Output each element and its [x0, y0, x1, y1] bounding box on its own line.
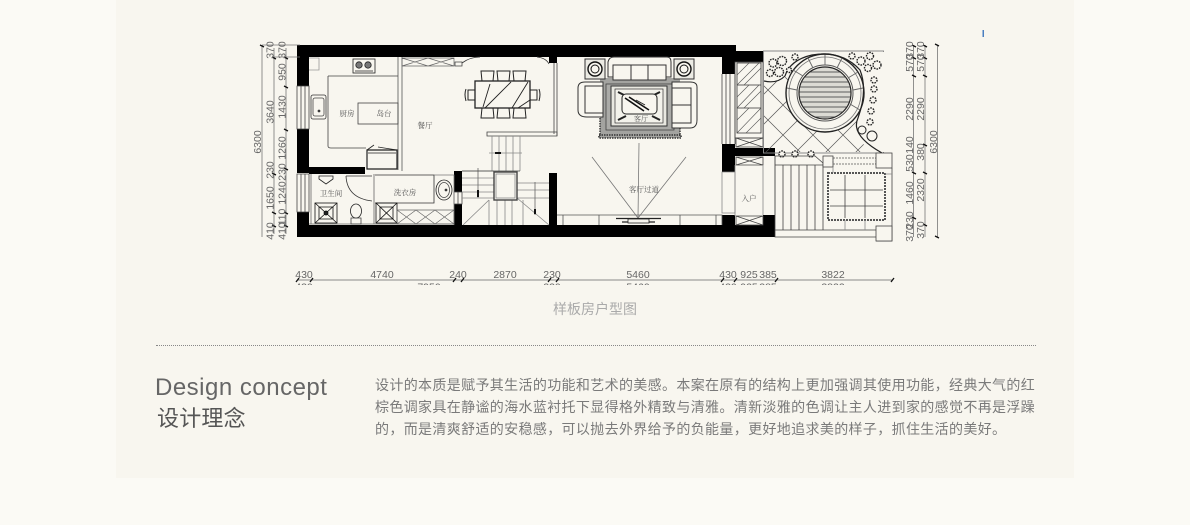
right dimensions: 370: [904, 224, 916, 242]
bottom dimensions: 5460: [626, 269, 650, 281]
room labels: 餐厅: [418, 120, 433, 130]
left dimensions: 3640: [264, 100, 276, 124]
toilet: [350, 204, 362, 224]
left dimensions: 370: [276, 41, 288, 59]
right dimensions: 140: [904, 136, 916, 154]
right dimensions: 1460: [904, 181, 916, 205]
dining table and chairs: [402, 58, 540, 118]
right dimensions: 370: [915, 221, 927, 239]
bottom dimensions: 430: [719, 269, 737, 281]
plants: [766, 52, 881, 157]
shower box: [315, 203, 337, 223]
living room: sofas: [578, 57, 697, 128]
bottom dimensions: 230: [543, 282, 561, 294]
stairs: [462, 136, 549, 225]
text block: design concept: 的，而是清爽舒适的安稳感，可以抛去外界给予的负能量，更好地追求美的样子，抓住生活的美好。: [375, 421, 1006, 437]
kitchen fittings: [309, 57, 402, 171]
room labels: 岛台: [376, 108, 392, 118]
right dimensions: 2290: [904, 97, 916, 121]
text block: design concept: 设计的本质是赋予其生活的功能和艺术的美感。本案在原有的结构上更加强调其使用功能，经典大气的红: [375, 377, 1035, 393]
walls: [297, 45, 775, 237]
caption: 样板房户型图: [553, 301, 637, 317]
bottom dimensions: [296, 271, 894, 285]
plant bed and paved circle: [764, 52, 884, 152]
room labels: 洗衣房: [394, 187, 417, 197]
panel: background: [116, 0, 1074, 478]
text block: design concept: [375, 377, 1035, 437]
right dimensions: 370: [904, 41, 916, 59]
bottom dimensions: 385: [759, 269, 777, 281]
cooktop: [353, 59, 375, 73]
room labels: 客厅过道: [629, 184, 659, 194]
bottom dimensions: 385: [759, 282, 777, 294]
bottom dimensions: 3822: [821, 269, 845, 281]
left dimensions: 6300: [252, 130, 264, 154]
left dimensions: 1650: [264, 186, 276, 210]
bottom dimensions: 925: [740, 282, 758, 294]
right dimensions: 6300: [928, 130, 940, 154]
left dimensions: 370: [264, 41, 276, 59]
curved bed edges: [764, 54, 882, 153]
left dimensions: 950: [276, 63, 288, 81]
room labels: 客厅: [634, 114, 648, 123]
left dimensions: 1430: [276, 95, 288, 119]
washbasin: [436, 180, 452, 200]
partition and curved ceiling: [455, 57, 557, 136]
left dimensions: 1240: [276, 181, 288, 205]
right dimensions: 370: [915, 41, 927, 59]
right dimensions: 2290: [915, 97, 927, 121]
icon: small blue mark: [982, 30, 984, 37]
left dimensions: 230: [264, 161, 276, 179]
living room: rug: [599, 78, 681, 138]
bottom dimensions: 3822: [821, 282, 845, 294]
left dimensions: 410: [264, 222, 276, 240]
bottom dimensions: 230: [543, 269, 561, 281]
room labels: 卫生间: [320, 188, 342, 198]
view cone and TV: [557, 143, 722, 225]
room labels: 厨房: [340, 108, 355, 118]
garden: [763, 50, 884, 158]
right dimensions: 230: [904, 211, 916, 229]
cabinets: [735, 62, 775, 225]
paving: [764, 64, 864, 152]
right dimensions: 530: [904, 154, 916, 172]
bottom dimensions: 430: [295, 269, 313, 281]
bottom dimensions: 2870: [493, 269, 517, 281]
entry terrace: [775, 153, 892, 241]
right dimensions: 380: [915, 143, 927, 161]
heading: Chinese: 设计理念: [157, 406, 246, 431]
bottom dimensions: 925: [740, 269, 758, 281]
floor plan: [254, 30, 984, 285]
fridge: [367, 145, 397, 169]
bottom dimensions: 240: [449, 269, 467, 281]
left dimensions: 1260: [276, 136, 288, 160]
windows: [297, 74, 735, 213]
heading: English: Design concept: [155, 374, 327, 401]
room labels: 入户: [742, 193, 756, 203]
bottom dimensions: 430: [719, 282, 737, 294]
bottom dimensions: 430: [295, 282, 313, 294]
right dimensions: 2320: [915, 178, 927, 202]
room labels: [320, 108, 756, 203]
left dimensions: 230: [276, 163, 288, 181]
text block: design concept: 棕色调家具在静谧的海水蓝衬托下显得格外精致与清雅。清新淡雅的色调让主人进到家的感觉不再是浮躁: [375, 399, 1035, 415]
washer: [376, 203, 397, 223]
kitchen sink: [311, 95, 326, 119]
bathroom and laundry: [309, 174, 454, 225]
right dimensions: [904, 41, 940, 242]
left dimensions: 110: [276, 208, 288, 225]
bottom dimensions: 5460: [626, 282, 650, 294]
bottom dimensions: 4740: [370, 269, 394, 281]
left dimensions: 410: [276, 222, 288, 240]
right dimensions: 570: [915, 54, 927, 72]
bottom dimensions: 7950: [417, 282, 441, 294]
left dimensions: [252, 41, 300, 240]
right dimensions: 570: [904, 54, 916, 72]
